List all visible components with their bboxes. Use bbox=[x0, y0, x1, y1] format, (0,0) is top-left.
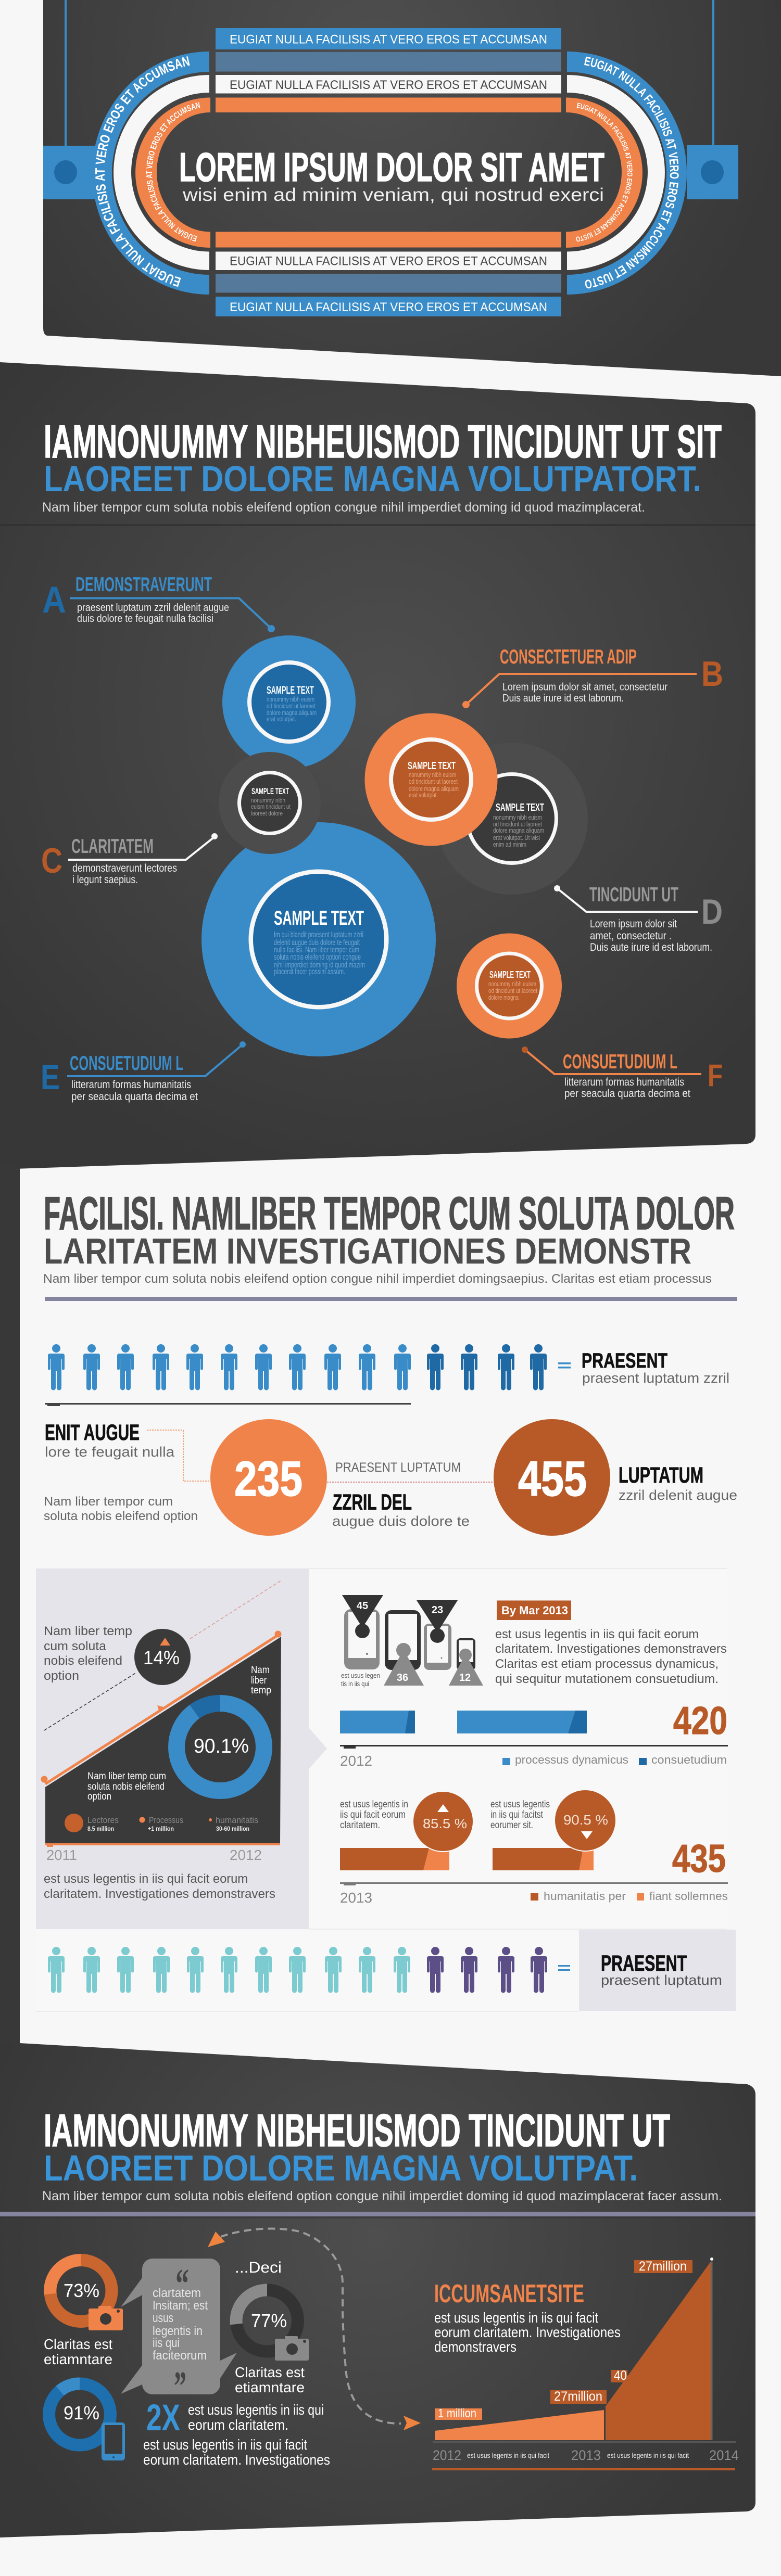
circle C: dark small: SAMPLE TEXT bbox=[251, 786, 289, 796]
bars 2012 bbox=[340, 1699, 728, 1769]
callout 85.5%: 85.5 % bbox=[423, 1816, 467, 1831]
heading: Nam liber tempor cum soluta nobis eleifend option congue nihil imperdiet domingsaepius. Claritas est etiam processus bbox=[43, 1272, 712, 1286]
callout: enit augue bbox=[45, 1420, 210, 1481]
caption 77%: etiamntare bbox=[235, 2379, 305, 2395]
subtitle: wisi enim ad minim veniam, qui nostrud exerci bbox=[182, 185, 604, 205]
donut 77%: 77% bbox=[251, 2310, 287, 2331]
caption 73%: Claritas est bbox=[44, 2336, 112, 2352]
label A: duis dolore te feugait nulla facilisi bbox=[77, 613, 213, 624]
bottom ribbon bars: EUGIAT NULLA FACILISIS AT VERO EROS ET ACCUMSAN bbox=[230, 254, 547, 269]
circle C: dark small: nonummy nibh bbox=[251, 797, 285, 804]
stat circle 235 bbox=[210, 1419, 327, 1536]
donut 91% bbox=[49, 2383, 110, 2445]
label C bbox=[41, 833, 218, 886]
legend 2012 bbox=[502, 1753, 727, 1766]
icon: orange camera bbox=[89, 2306, 123, 2330]
axis and years bbox=[45, 1843, 280, 1863]
label D: amet, consectetur . bbox=[590, 930, 672, 942]
circle B: orange: SAMPLE TEXT bbox=[408, 760, 456, 772]
top ribbon bars bbox=[216, 28, 561, 112]
circle D: dark large bbox=[436, 743, 588, 895]
circle D: dark large: nonummy nibh euism bbox=[493, 813, 542, 821]
left dark connector strip bbox=[0, 1166, 20, 2050]
chart note bottom: option bbox=[87, 1791, 111, 1802]
phones pictogram: 45 bbox=[357, 1600, 368, 1612]
stat 2X: est usus legentis in iis qui facit bbox=[143, 2437, 307, 2453]
text: luptatum bbox=[619, 1463, 737, 1503]
timeline labels: 2014 bbox=[709, 2447, 739, 2463]
donut 90.1% bbox=[177, 1703, 264, 1791]
data label: 27million top: 27million bbox=[639, 2259, 687, 2274]
panel: right stats background bbox=[309, 1568, 727, 1930]
phones pictogram: tis in iis qui bbox=[341, 1680, 369, 1688]
text beside badge: option bbox=[44, 1669, 79, 1683]
legend 2013: fiant sollemnes bbox=[649, 1890, 728, 1903]
callout 90.5%: 90.5 % bbox=[563, 1812, 608, 1828]
badge 14%: 14% bbox=[143, 1647, 180, 1668]
circle F: orange small: dolore magna bbox=[488, 993, 519, 1001]
left blue tab bbox=[43, 146, 95, 199]
timeline labels: 2013 bbox=[571, 2447, 601, 2463]
caption 77%: Claritas est bbox=[235, 2364, 305, 2380]
label D: Duis aute irure id est laborum. bbox=[590, 941, 712, 953]
heading: iccumsan et site: eorum claritatem. Investigationes bbox=[434, 2324, 621, 2340]
speech bubble quote: faciteorum bbox=[153, 2349, 207, 2363]
circle E: blue large: placerat facer possim assum. bbox=[274, 967, 345, 976]
label C: C bbox=[41, 841, 62, 881]
callout: enit augue: ENIT AUGUE bbox=[45, 1420, 140, 1445]
data label: 27million mid: 27million bbox=[554, 2389, 602, 2404]
legend 2012: consuetudium bbox=[651, 1753, 727, 1766]
speech bubble quote: ” bbox=[174, 2364, 186, 2409]
circle A: blue small: dolore magna aliquam bbox=[267, 709, 317, 717]
label B: B bbox=[701, 654, 723, 694]
caption 77% bbox=[235, 2364, 305, 2395]
chart note bottom bbox=[87, 1771, 166, 1802]
bottom ribbon bars: EUGIAT NULLA FACILISIS AT VERO EROS ET ACCUMSAN bbox=[230, 300, 547, 314]
stat circle 455: 455 bbox=[518, 1451, 587, 1507]
bars 2012: 2012 bbox=[340, 1753, 372, 1769]
text: deci: ...Deci bbox=[235, 2259, 282, 2276]
phones pictogram bbox=[341, 1595, 483, 1688]
description text bbox=[495, 1627, 727, 1686]
heading: Nam liber tempor cum soluta nobis eleifend option congue nihil imperdiet doming id quod mazimplacerat. bbox=[42, 500, 645, 515]
label A bbox=[42, 573, 275, 632]
legend: Processus bbox=[149, 1815, 183, 1825]
equals sign and caption: PRAESENT bbox=[582, 1349, 667, 1372]
circle A: blue small bbox=[222, 635, 356, 769]
circle D: dark large: dolore magna aliquam bbox=[493, 826, 544, 834]
circle F: orange small: SAMPLE TEXT bbox=[489, 970, 531, 980]
axis and years: 2011 bbox=[46, 1847, 77, 1863]
heading: iccumsan et site bbox=[434, 2280, 621, 2355]
label B bbox=[462, 646, 723, 708]
callout 85.5%: claritatem. bbox=[340, 1820, 380, 1831]
data label: 40: 40 bbox=[614, 2368, 627, 2383]
circle A: blue small: erat volutpat. bbox=[267, 715, 296, 723]
circle F: orange small: od tincidunt ut laoreet bbox=[488, 987, 537, 994]
heading: iccumsan et site: demonstravers bbox=[434, 2339, 517, 2355]
bars 2013: 2013 bbox=[340, 1890, 372, 1906]
label A: A bbox=[42, 580, 66, 621]
stat circle 455 bbox=[494, 1419, 610, 1536]
circle D: dark large: SAMPLE TEXT bbox=[496, 802, 544, 813]
callout 90.5%: est usus legentis bbox=[490, 1799, 550, 1810]
label D bbox=[554, 884, 723, 953]
label F: per seacula quarta decima et bbox=[564, 1088, 690, 1100]
left curved bands: EUGIAT NULLA FACILISIS AT VERO EROS ET ACCUMSAN bbox=[146, 102, 200, 241]
connector and middle text: augue duis dolore te bbox=[332, 1513, 470, 1529]
caption 73% bbox=[44, 2336, 112, 2367]
label F: CONSUETUDIUM L bbox=[563, 1051, 677, 1073]
label C: CLARITATEM bbox=[71, 835, 154, 858]
bars 2013: 435 bbox=[672, 1837, 726, 1880]
stat 2X: est usus legentis in iis qui bbox=[188, 2402, 324, 2418]
panel: connected circles bbox=[0, 362, 755, 1169]
phones pictogram: 36 bbox=[397, 1672, 408, 1684]
text: nam liber bbox=[44, 1495, 198, 1523]
circle C: dark small bbox=[219, 752, 321, 854]
label D: D bbox=[701, 892, 723, 932]
donut 91%: 91% bbox=[64, 2402, 99, 2424]
heading: LAOREET DOLORE MAGNA VOLUTPAT. bbox=[44, 2148, 638, 2188]
panel: closing section bbox=[0, 2042, 755, 2537]
legend 2013: humanitatis per bbox=[544, 1890, 626, 1903]
chart note top bbox=[251, 1665, 271, 1696]
stat 2X: eorum claritatem. Investigationes bbox=[143, 2452, 330, 2468]
description text: claritatem. Investigationes demonstravers bbox=[495, 1642, 727, 1656]
circle D: dark large: erat volutpat. Ut wisi bbox=[493, 834, 540, 841]
timeline labels: est usus legents in iis qui facit bbox=[467, 2451, 549, 2459]
data label: 1 million: 1 million bbox=[438, 2406, 476, 2420]
label F bbox=[522, 1047, 723, 1100]
equals sign and caption bbox=[558, 1349, 729, 1386]
speech bubble quote: legentis in bbox=[153, 2324, 203, 2338]
label E bbox=[41, 1041, 246, 1103]
circle B: orange: od tincidunt ut laoreet bbox=[409, 777, 458, 785]
chart caption: est usus legentis in iis qui facit eorum bbox=[44, 1872, 248, 1886]
icon: gray camera bbox=[275, 2336, 309, 2361]
caption 73%: etiamntare bbox=[44, 2351, 112, 2367]
callout 90.5% bbox=[490, 1790, 616, 1851]
chart caption bbox=[44, 1872, 275, 1901]
caption box bbox=[579, 1930, 736, 2011]
chart note bottom: soluta nobis eleifend bbox=[87, 1781, 165, 1792]
area chart bbox=[433, 2258, 736, 2443]
circle A: blue small: nonummy nibh euism bbox=[267, 695, 314, 703]
panel: growth chart bbox=[36, 1568, 327, 1929]
callout 90.5%: eorumer sit. bbox=[490, 1820, 533, 1831]
right curved bands: EUGIAT NULLA FACILISIS AT VERO EROS ET ACCUMSAN ET IUSTO bbox=[584, 56, 679, 288]
right blue tab bbox=[687, 145, 738, 199]
top ribbon bars: EUGIAT NULLA FACILISIS AT VERO EROS ET ACCUMSAN bbox=[230, 32, 547, 47]
speech bubble quote: iis qui bbox=[153, 2336, 180, 2350]
stat 2X bbox=[143, 2398, 330, 2468]
area shape bbox=[45, 1637, 281, 1843]
circle D: dark large: od tincidunt ut laoreet bbox=[493, 820, 542, 828]
panel: title banner bbox=[43, 0, 781, 376]
circle E: blue large: soluta nobis eleifend option congue bbox=[274, 953, 361, 962]
label D: TINCIDUNT UT bbox=[589, 884, 678, 906]
legend: Lectores bbox=[87, 1815, 119, 1825]
chart note bottom: Nam liber temp cum bbox=[87, 1771, 166, 1782]
circle B: orange bbox=[364, 713, 498, 846]
heading bbox=[43, 1187, 735, 1286]
circle B: orange: erat volutpat. bbox=[409, 791, 438, 799]
stat 2X: eorum claritatem. bbox=[188, 2417, 288, 2433]
equals sign and caption: praesent luptatum zzril bbox=[582, 1370, 729, 1386]
callout: enit augue: lore te feugait nulla bbox=[45, 1444, 175, 1460]
circle D: dark large: enim ad minim bbox=[493, 840, 526, 848]
phones pictogram: 23 bbox=[432, 1604, 443, 1616]
stat 2X: 2X bbox=[146, 2398, 180, 2439]
label D: Lorem ipsum dolor sit bbox=[590, 918, 677, 930]
legend: 30-60 million bbox=[216, 1825, 249, 1832]
bottom ribbon bars bbox=[216, 232, 561, 316]
axis and years: 2012 bbox=[230, 1847, 262, 1863]
circle F: orange small: nonummy nibh euism bbox=[488, 980, 536, 988]
label E: CONSUETUDIUM L bbox=[70, 1052, 183, 1075]
label E: E bbox=[41, 1057, 60, 1097]
text beside badge: nobis eleifend bbox=[44, 1654, 122, 1668]
circle E: blue large: delenit augue duis dolore te feugait bbox=[274, 938, 360, 947]
text beside badge: cum soluta bbox=[44, 1639, 107, 1653]
text: luptatum: zzril delenit augue bbox=[619, 1487, 737, 1503]
description text: qui sequitur mutationem consuetudium. bbox=[495, 1672, 719, 1686]
callout 85.5% bbox=[340, 1791, 473, 1852]
circle E: blue large: Im qui blandit praesent luptatum zzril bbox=[274, 930, 363, 939]
caption box: praesent luptatum bbox=[601, 1972, 722, 1988]
legend: 8.5 million bbox=[87, 1825, 114, 1832]
circle A: blue small: od tincidunt ut laoreet bbox=[267, 702, 316, 710]
speech bubble quote: clartatem bbox=[153, 2286, 201, 2300]
description text: Claritas est etiam processus dynamicus, bbox=[495, 1657, 719, 1671]
heading bbox=[42, 415, 722, 515]
label C: i legunt saepius. bbox=[72, 874, 138, 886]
legend: humanitatis bbox=[216, 1815, 258, 1825]
text: luptatum: LUPTATUM bbox=[619, 1463, 703, 1488]
bars 2013 bbox=[340, 1837, 728, 1906]
heading: iccumsan et site: est usus legentis in iis qui facit bbox=[434, 2310, 598, 2326]
chart note top: Nam bbox=[251, 1665, 270, 1676]
label F: F bbox=[708, 1058, 723, 1093]
text beside badge: Nam liber temp bbox=[44, 1624, 132, 1638]
label A: praesent luptatum zzril delenit augue bbox=[77, 602, 229, 614]
text: nam liber: soluta nobis eleifend option bbox=[44, 1509, 198, 1523]
caption box: PRAESENT bbox=[601, 1951, 687, 1976]
heading bbox=[42, 2105, 722, 2203]
right curved bands: EUGIAT NULLA FACILISIS AT VERO EROS ET ACCUMSAN ET IUSTO bbox=[576, 103, 633, 241]
dashed arrow path bbox=[208, 2229, 421, 2430]
text: nam liber: Nam liber tempor cum bbox=[44, 1495, 173, 1509]
chart caption: claritatem. Investigationes demonstravers bbox=[44, 1887, 275, 1901]
chart note top: temp bbox=[251, 1685, 271, 1696]
circle E: blue large: SAMPLE TEXT bbox=[274, 907, 364, 929]
trend line bbox=[41, 1631, 281, 1784]
label C: demonstraverunt lectores bbox=[72, 862, 177, 874]
circle C: dark small: euism tincidunt ut bbox=[251, 803, 291, 810]
people row: blue bbox=[48, 1344, 547, 1391]
panel: statistics section bbox=[36, 1187, 737, 2012]
description text: est usus legentis in iis qui facit eorum bbox=[495, 1627, 699, 1641]
legend 2012: processus dynamicus bbox=[515, 1753, 628, 1766]
donut 90.1%: 90.1% bbox=[194, 1735, 249, 1757]
circle E: blue large bbox=[201, 822, 436, 1056]
people row: teal and purple bbox=[48, 1947, 547, 1993]
donut 73% bbox=[50, 2260, 111, 2322]
bars 2012: 420 bbox=[673, 1699, 727, 1742]
circle B: orange: nonummy nibh euism bbox=[409, 771, 456, 779]
circle F: orange small bbox=[457, 934, 562, 1039]
chart note top: liber bbox=[251, 1675, 267, 1686]
circle A: blue small: SAMPLE TEXT bbox=[267, 684, 314, 696]
date tag: By Mar 2013 bbox=[501, 1604, 568, 1617]
top ribbon bars: EUGIAT NULLA FACILISIS AT VERO EROS ET ACCUMSAN bbox=[230, 78, 547, 92]
connector and middle text: PRAESENT LUPTATUM bbox=[335, 1460, 461, 1475]
heading: iccumsan et site: ICCUMSANETSITE bbox=[434, 2280, 584, 2308]
text beside badge bbox=[44, 1624, 132, 1683]
badge 14% bbox=[134, 1629, 191, 1685]
label E: litterarum formas humanitatis bbox=[71, 1079, 191, 1091]
speech bubble quote: Insitam; est bbox=[153, 2299, 208, 2313]
legend bbox=[65, 1814, 258, 1832]
timeline labels: 2012 bbox=[433, 2447, 461, 2463]
legend 2013 bbox=[531, 1890, 728, 1903]
speech bubble quote: “ bbox=[175, 2261, 189, 2307]
circle E: blue large: nihil imperdiet doming id quod mazim bbox=[274, 961, 365, 970]
connector and middle text bbox=[327, 1460, 494, 1529]
connector and middle text: ZZRIL DEL bbox=[333, 1490, 412, 1515]
stat circle 235: 235 bbox=[234, 1451, 303, 1507]
phones pictogram: 12 bbox=[459, 1672, 471, 1684]
callout 90.5%: in iis qui facitst bbox=[490, 1809, 544, 1820]
donut 73%: 73% bbox=[64, 2280, 99, 2301]
legend: +1 million bbox=[148, 1825, 174, 1832]
timeline labels: est usus legents in iis qui facit bbox=[607, 2451, 689, 2459]
heading: Nam liber tempor cum soluta nobis eleifend option congue nihil imperdiet doming id quod mazimplacerat facer assum. bbox=[42, 2189, 722, 2203]
donut 77% bbox=[236, 2290, 298, 2351]
label A: DEMONSTRAVERUNT bbox=[75, 573, 212, 596]
people row panel bbox=[36, 1930, 579, 2012]
phones pictogram: est usus legen bbox=[341, 1672, 380, 1679]
label B: CONSECTETUER ADIP bbox=[500, 646, 637, 668]
callout 85.5%: est usus legentis in bbox=[340, 1799, 408, 1810]
circle B: orange: dolore magna aliquam bbox=[409, 785, 459, 793]
icon: phone bbox=[102, 2422, 125, 2460]
speech bubble quote: usus bbox=[153, 2311, 173, 2325]
timeline labels bbox=[432, 2447, 739, 2470]
speech bubble quote bbox=[121, 2259, 237, 2409]
date tag bbox=[497, 1601, 571, 1620]
label B: Duis aute irure id est laborum. bbox=[502, 693, 624, 704]
left curved bands: EUGIAT NULLA FACILISIS AT VERO EROS ET ACCUMSAN bbox=[95, 56, 190, 287]
label E: per seacula quarta decima et bbox=[71, 1091, 198, 1103]
dashed trend bbox=[44, 1580, 281, 1730]
label B: Lorem ipsum dolor sit amet, consectetur bbox=[502, 682, 667, 693]
circle E: blue large: nulla facilisi. Nam liber tempor cum bbox=[274, 946, 359, 954]
label F: litterarum formas humanitatis bbox=[564, 1076, 684, 1088]
callout 85.5%: iis qui facit eorum bbox=[340, 1809, 406, 1820]
circle C: dark small: laoreet dolore bbox=[251, 810, 283, 817]
